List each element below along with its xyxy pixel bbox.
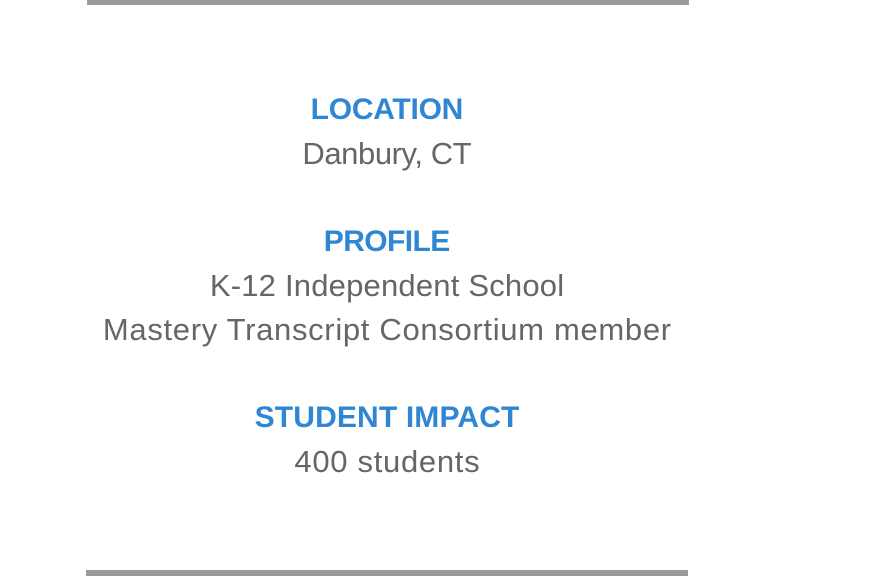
- bottom rule: [86, 570, 688, 576]
- text: student count: 400 students: [294, 444, 480, 479]
- text: profile type: K-12 Independent School: [210, 268, 564, 303]
- text: profile membership: Mastery Transcript Consortium member: [103, 312, 672, 347]
- heading: location: LOCATION: [311, 93, 463, 126]
- heading: profile: PROFILE: [324, 225, 450, 258]
- top rule: [87, 0, 689, 5]
- text: location value: Danbury, CT: [302, 136, 471, 171]
- heading: student impact: STUDENT IMPACT: [255, 401, 520, 434]
